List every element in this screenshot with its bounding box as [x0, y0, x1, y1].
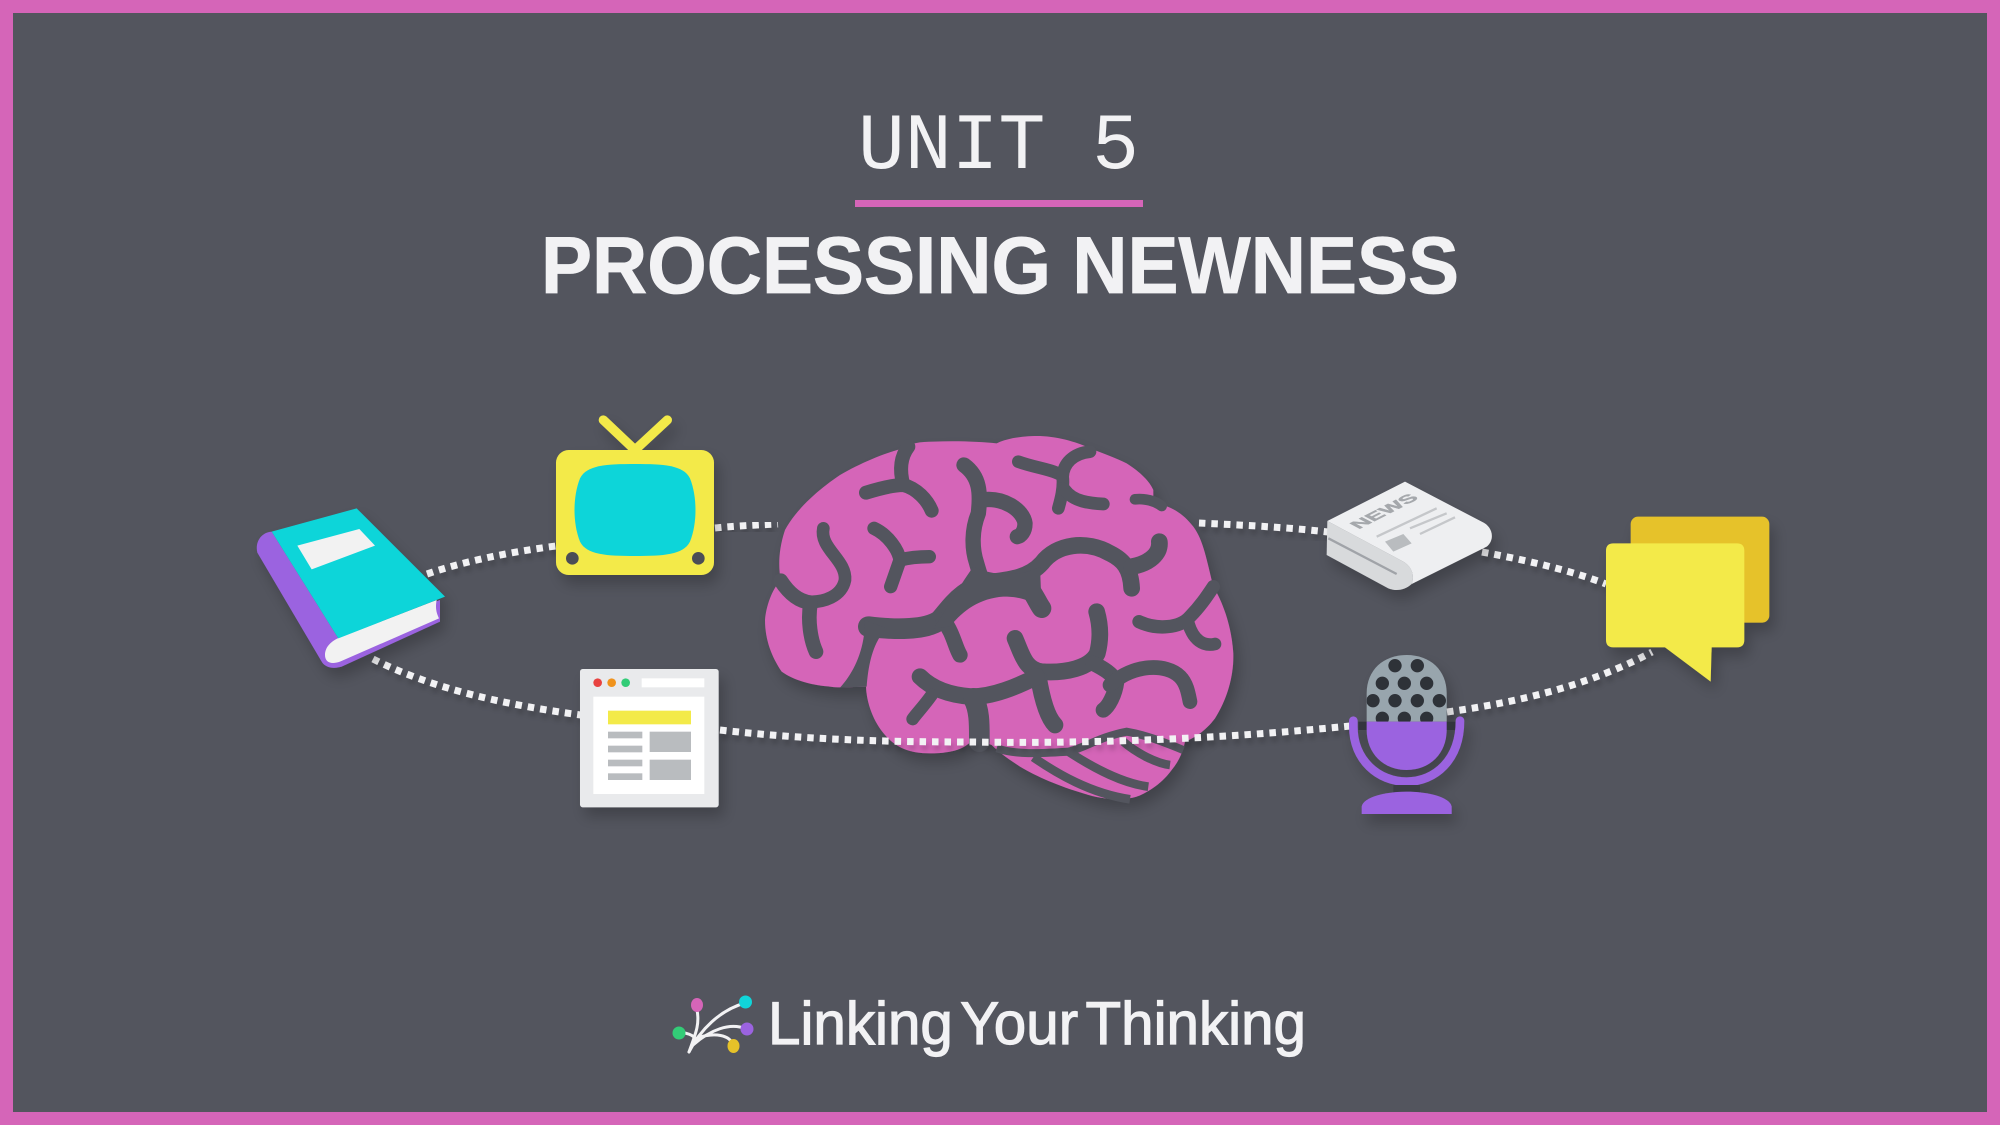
- dotted connector: browser through brain to microphone: [720, 726, 1350, 742]
- icon: microphone: [1353, 655, 1460, 814]
- dotted connector: brain to newspaper: [1199, 523, 1328, 532]
- dotted connector: book to browser: [373, 659, 581, 715]
- brain silhouette: [765, 436, 1233, 799]
- heading underline: [855, 200, 1143, 207]
- icon: newspaper: NEWS: [1345, 491, 1423, 531]
- logo mark: [672, 996, 754, 1053]
- logo wordmark: Linking Your Thinking: [768, 990, 1306, 1057]
- dotted connector: newspaper to chat: [1482, 552, 1606, 584]
- brain central junction: [933, 567, 1042, 628]
- dotted connector: book to tv: [427, 546, 556, 574]
- dotted connector: microphone to chat: [1447, 652, 1652, 712]
- brain central notch: [840, 620, 887, 688]
- heading: unit title: PROCESSING NEWNESS: [541, 221, 1459, 311]
- heading: unit number: UNIT 5: [858, 102, 1139, 193]
- icon: television: [556, 420, 714, 575]
- icon: book: [257, 508, 445, 668]
- dotted connector: tv to brain: [715, 524, 778, 528]
- icon: browser window: [580, 669, 719, 807]
- brain folds: [781, 447, 1215, 799]
- brain illustration: [765, 436, 1233, 799]
- icon: newspaper: [1327, 482, 1492, 590]
- icon: chat bubbles: [1606, 517, 1769, 682]
